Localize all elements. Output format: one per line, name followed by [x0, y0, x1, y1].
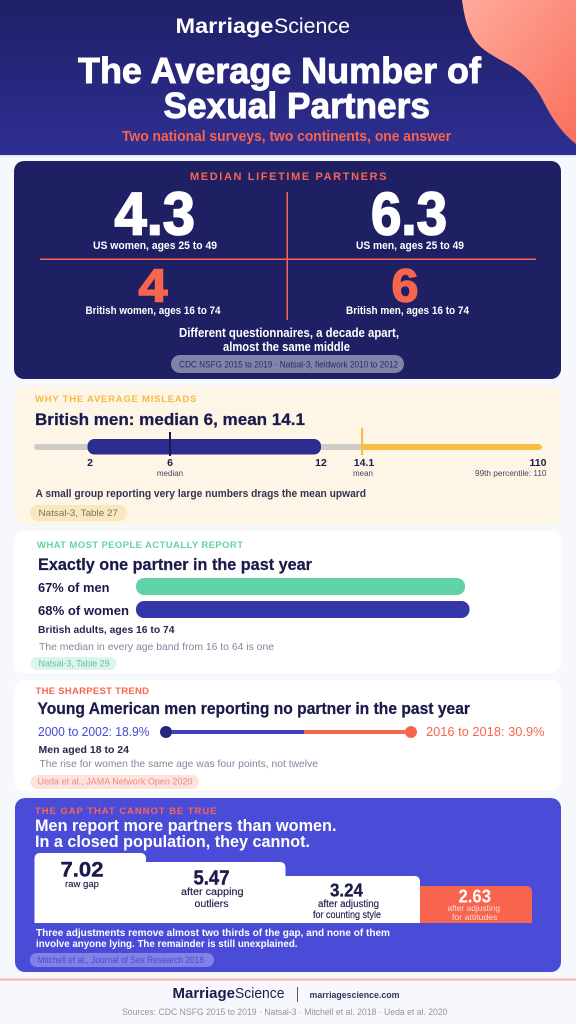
takeaway: [179, 326, 399, 354]
panel: what most people actually report: [14, 531, 561, 673]
title: [78, 50, 482, 126]
panel: the gap that cannot be true: [15, 798, 561, 972]
step: after adjusting for attitudes: for attitudes: [452, 912, 498, 922]
takeaway: almost the same middle: [223, 340, 350, 354]
heading: [35, 816, 336, 851]
panel label: THE SHARPEST TREND: [36, 686, 149, 697]
stat: British women: British women, ages 16 to 74: [86, 305, 221, 317]
source pill: Ueda et al., JAMA Network Open 2020: [38, 776, 192, 788]
step: after adjusting for counting style: [313, 880, 381, 921]
step chart: [34, 853, 532, 923]
range chart: 2: [87, 457, 93, 469]
stat: US men: US men, ages 25 to 49: [356, 240, 464, 252]
step: after capping outliers: outliers: [194, 899, 228, 910]
population note: British adults, ages 16 to 74: [38, 624, 175, 636]
panel: the sharpest trend: [14, 680, 561, 791]
header banner: [0, 0, 576, 156]
panel label: WHAT MOST PEOPLE ACTUALLY REPORT: [37, 540, 243, 551]
stat: US men: 6.3: [371, 180, 447, 248]
explanation: involve anyone lying. The remainder is still unexplained.: [36, 938, 298, 950]
dumbbell chart: 2016 to 2018: 30.9%: [426, 725, 544, 739]
stat: British women: [86, 260, 221, 317]
footer logo: [172, 985, 284, 1002]
panel label: WHY THE AVERAGE MISLEADS: [35, 394, 196, 405]
step: after capping outliers: [181, 868, 244, 910]
sources: Sources: CDC NSFG 2015 to 2019 · Natsal-3 · Mitchell et al. 2018 · Ueda et al. 2020: [122, 1007, 448, 1017]
bar chart: [38, 578, 470, 618]
stat: British men: British men, ages 16 to 74: [346, 305, 470, 317]
logo: [176, 15, 350, 38]
range chart: 6: [167, 457, 173, 469]
population note: Men aged 18 to 24: [38, 744, 129, 756]
title: Sexual Partners: [164, 85, 430, 126]
stat: US women: US women, ages 25 to 49: [93, 240, 217, 252]
logo: Science: [274, 15, 350, 38]
source pill: CDC NSFG 2015 to 2019 · Natsal-3, fieldwork 2010 to 2012: [179, 360, 398, 370]
panel: median lifetime partners: [14, 161, 561, 379]
dumbbell chart: 2000 to 2002: 18.9%: [38, 725, 150, 739]
explanation: Three adjustments remove almost two thirds of the gap, and none of them: [36, 927, 390, 939]
source pill: [30, 657, 116, 670]
step: after adjusting for counting style: 3.24: [330, 880, 363, 900]
caption: A small group reporting very large numbers drags the mean upward: [36, 488, 366, 500]
stat: British men: 6: [392, 260, 418, 312]
range chart: mean: [353, 469, 373, 478]
step: after capping outliers: after capping: [181, 887, 244, 898]
title: The Average Number of: [78, 50, 482, 91]
bar chart: 67% of men: [38, 580, 110, 595]
source pill: Mitchell et al., Journal of Sex Research 2018: [38, 955, 204, 966]
step: after adjusting for counting style: after adjusting: [318, 899, 379, 910]
source pill: Natsal-3, Table 29: [38, 658, 110, 668]
source pill: Natsal-3, Table 27: [38, 508, 118, 519]
bar chart: 68% of women: [38, 603, 129, 618]
dumbbell chart: [38, 725, 544, 739]
step: after adjusting for counting style: for counting style: [313, 910, 381, 921]
range chart: 14.1: [354, 457, 374, 469]
takeaway: Different questionnaires, a decade apart,: [179, 326, 399, 340]
stat: British women: 4: [138, 260, 168, 312]
stat: US women: 4.3: [114, 180, 195, 248]
step: raw gap: [60, 858, 104, 890]
footer logo: Science: [235, 985, 284, 1002]
step: after adjusting for attitudes: 2.63: [458, 886, 491, 906]
heading: Exactly one partner in the past year: [38, 555, 312, 574]
stat: US women: [93, 180, 217, 252]
step: raw gap: 7.02: [60, 858, 104, 882]
panel label: MEDIAN LIFETIME PARTNERS: [190, 171, 386, 183]
step: raw gap: raw gap: [65, 879, 99, 890]
logo: Marriage: [176, 15, 274, 38]
explanation: [36, 927, 390, 950]
heading: British men: median 6, mean 14.1: [35, 410, 305, 429]
range chart: 99th percentile: 110: [475, 469, 547, 478]
decorative coral blob: [462, 0, 576, 144]
panel: why the average misleads: [14, 386, 561, 525]
source pill: [171, 355, 404, 373]
subtitle: Two national surveys, two continents, one answer: [122, 128, 451, 145]
heading: Young American men reporting no partner in the past year: [38, 699, 470, 718]
source pill: [30, 505, 127, 521]
step: after adjusting for attitudes: [448, 886, 500, 922]
panel label: THE GAP THAT CANNOT BE TRUE: [35, 806, 216, 817]
heading: Men report more partners than women.: [35, 816, 336, 835]
website: marriagescience.com: [310, 990, 400, 1000]
comparison note: The rise for women the same age was four points, not twelve: [40, 758, 318, 770]
step: after capping outliers: 5.47: [194, 868, 230, 890]
quadrant dividers: [40, 192, 536, 320]
median note: The median in every age band from 16 to 64 is one: [39, 641, 274, 653]
range chart: 12: [315, 457, 327, 469]
footer logo: Marriage: [172, 985, 235, 1002]
range chart: median: [157, 469, 183, 478]
footer: [0, 978, 576, 1017]
step: after adjusting for attitudes: after adjusting: [448, 903, 500, 913]
heading: In a closed population, they cannot.: [35, 832, 310, 851]
stat: British men: [346, 260, 470, 317]
range chart: 110: [530, 457, 547, 469]
range chart: [34, 428, 547, 478]
